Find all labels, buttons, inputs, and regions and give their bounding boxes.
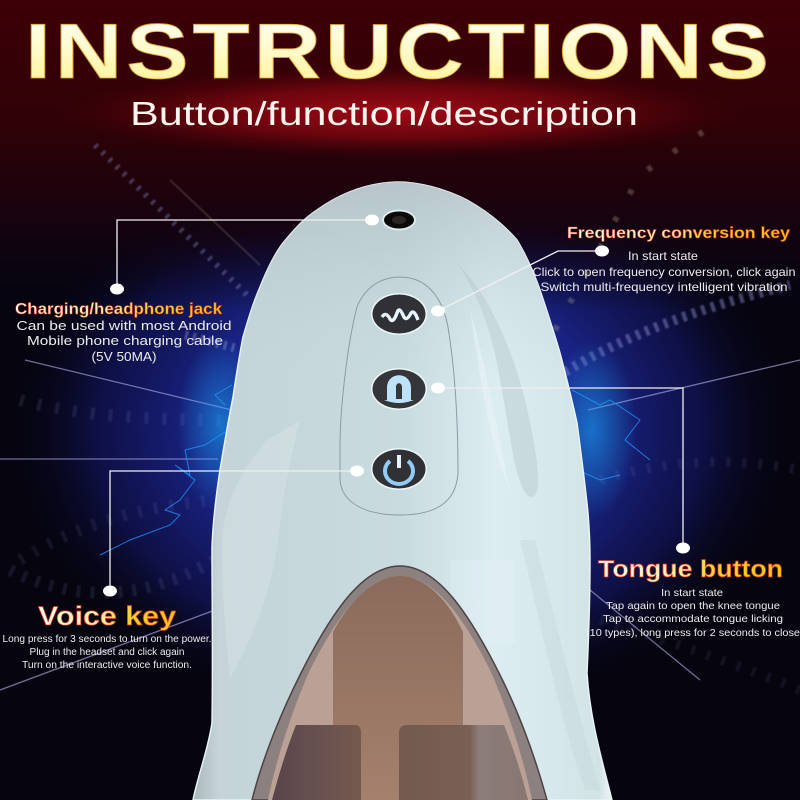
text block: frequency key: Click to open frequency conversion, click again	[532, 265, 796, 279]
text block: tongue button	[586, 556, 800, 639]
text block: charging jack: Mobile phone charging cable	[27, 333, 223, 348]
power button icon	[371, 448, 427, 490]
button panel outline	[340, 277, 458, 515]
frequency button icon	[371, 293, 427, 335]
subtitle: Button/function/description	[130, 95, 638, 132]
text block: voice key: Long press for 3 seconds to turn on the power.	[2, 634, 212, 645]
text block: voice key: Plug in the headset and click again	[30, 647, 185, 658]
product body	[193, 182, 612, 800]
text block: voice key	[2, 601, 212, 671]
text block: tongue button: Tap to accommodate tongue licking	[603, 613, 783, 625]
charging jack	[382, 210, 416, 230]
text block: tongue button: (10 types), long press for 2 seconds to close	[586, 627, 800, 639]
callout line: tongue button	[431, 382, 690, 554]
text block: charging jack: (5V 50MA)	[92, 349, 156, 364]
text block: frequency key: In start state	[628, 249, 698, 263]
text block: charging jack: Can be used with most Android	[16, 318, 232, 333]
callout line: frequency key	[431, 246, 609, 316]
text block: tongue button: In start state	[661, 587, 723, 599]
text block: voice key: Voice key	[38, 601, 176, 631]
text block: frequency key	[532, 225, 796, 294]
text block: charging jack	[15, 301, 232, 364]
streak lines	[0, 360, 800, 690]
tongue button icon	[371, 368, 427, 410]
text block: tongue button: Tongue button	[598, 556, 783, 583]
text block: tongue button: Tap again to open the knee tongue	[606, 600, 780, 612]
body highlights	[222, 263, 600, 790]
callout line: charging jack	[110, 214, 379, 294]
chip ray texture	[10, 120, 800, 690]
text block: frequency key: Switch multi-frequency intelligent vibration	[540, 280, 788, 294]
inner cylinders	[272, 725, 528, 800]
callout line: voice key	[103, 466, 364, 596]
text block: frequency key: Frequency conversion key	[567, 225, 790, 242]
lightning	[100, 385, 650, 555]
title: INSTRUCTIONS	[25, 8, 769, 95]
text block: voice key: Turn on the interactive voice function.	[22, 660, 192, 671]
cavity window	[252, 566, 547, 800]
text block: charging jack: Charging/headphone jack	[15, 301, 222, 318]
